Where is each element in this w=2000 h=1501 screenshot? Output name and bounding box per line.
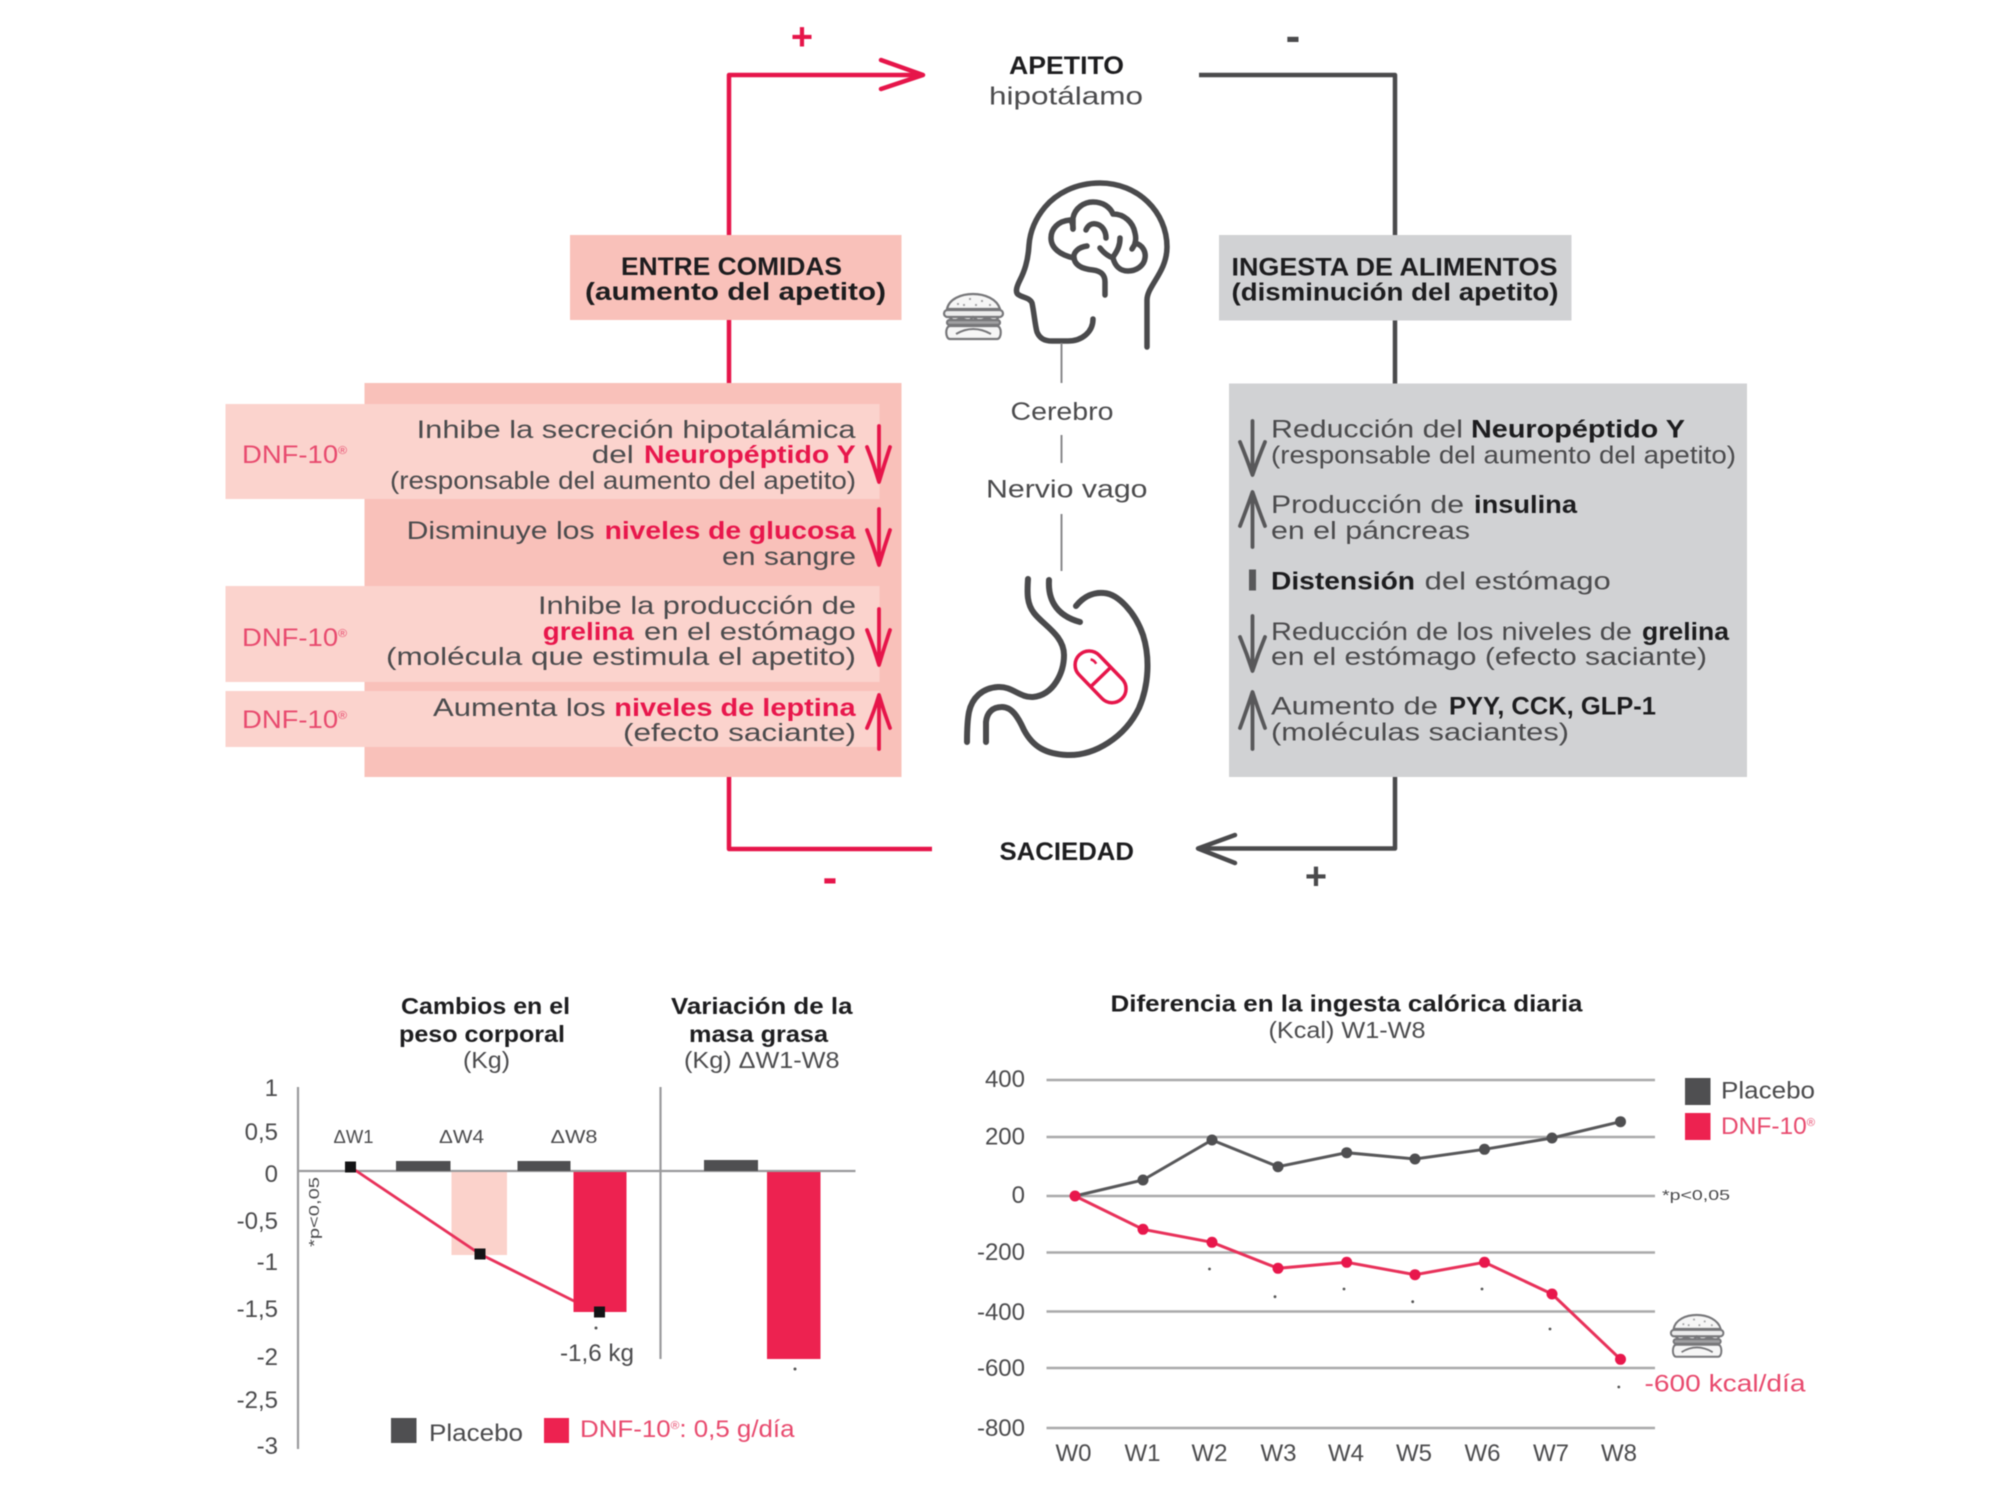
chart: body weight and fat mass bars — [237, 993, 856, 1460]
text: insulina — [1271, 491, 1578, 545]
legend: Placebo — [1721, 1078, 1815, 1104]
note: significance: *p<0,05 — [1662, 1187, 1730, 1204]
y axis labels: -2 — [257, 1344, 278, 1371]
label: nervio vago: Nervio vago — [986, 476, 1148, 504]
box: ingesta de alimentos — [1219, 235, 1572, 320]
legend: DNF-10 — [1721, 1113, 1805, 1140]
text: leptina — [433, 694, 857, 747]
heading: saciedad: SACIEDAD — [1000, 838, 1134, 866]
icon: stomach with pill — [967, 579, 1148, 755]
heading: apetito: hipotálamo — [989, 82, 1143, 110]
x axis labels: W2 — [1192, 1440, 1228, 1467]
label: DNF-10 row 1: DNF-10 — [242, 441, 330, 469]
icon: head with brain — [1016, 183, 1167, 347]
text: grelina — [1271, 618, 1730, 671]
text: grelina: (molécula que estimula el apetito) — [386, 643, 856, 671]
label: DNF-10 row 4: ® — [338, 710, 347, 722]
box: ingesta de alimentos: INGESTA DE ALIMENTOS — [1232, 254, 1558, 282]
legend: : 0,5 g/día — [679, 1416, 795, 1443]
sign: plus top left: + — [791, 16, 813, 58]
label: DNF-10 row 4: DNF-10 — [242, 706, 330, 734]
text: neuropeptido Y: (responsable del aumento del apetito) — [1271, 442, 1736, 470]
week labels: ΔW1 — [334, 1127, 374, 1147]
text: neuropeptido Y: Reducción del — [1271, 416, 1463, 444]
chart title: masa grasa: Variación de la — [671, 993, 853, 1019]
legend: DNF-10 — [580, 1416, 664, 1443]
text: glucosa: en sangre — [722, 543, 856, 571]
y axis labels: -200 — [977, 1239, 1025, 1266]
y axis labels — [237, 1075, 278, 1460]
icon: burger near head — [944, 294, 1003, 339]
box: entre comidas — [570, 235, 902, 320]
note: significance: *p<0,05 — [306, 1177, 323, 1247]
significance marks — [1208, 1268, 1620, 1388]
grid lines — [1046, 1080, 1655, 1428]
DNF-10 bars and trend line — [350, 1167, 820, 1359]
callout: -1,6 kg: -1,6 kg — [560, 1340, 634, 1367]
brain outline — [1051, 202, 1145, 295]
legend — [391, 1416, 795, 1447]
y axis labels — [977, 1066, 1025, 1442]
y axis labels: -800 — [977, 1415, 1025, 1442]
text: PYY CCK GLP-1: PYY, CCK, GLP-1 — [1449, 692, 1656, 720]
icon: burger near chart — [1671, 1315, 1723, 1357]
legend — [1685, 1078, 1815, 1140]
text: grelina: Inhibe la producción de — [538, 592, 856, 620]
text: neuropeptido Y: Inhibe la secreción hipotalámica — [417, 416, 856, 444]
text: grelina: Reducción de los niveles de — [1271, 618, 1632, 646]
flow: red appetite loop arrow — [729, 60, 932, 849]
text: PYY CCK GLP-1: Aumento de — [1271, 692, 1438, 720]
chart title: masa grasa: masa grasa — [689, 1021, 828, 1047]
sign: minus top right: - — [1286, 12, 1300, 60]
y axis labels: -1 — [257, 1249, 278, 1276]
text: neuropeptido Y: Neuropéptido Y — [1471, 416, 1685, 444]
connector: brain to stomach — [1060, 343, 1062, 571]
legend: ® — [1807, 1117, 1815, 1129]
y axis labels: -2,5 — [237, 1387, 278, 1414]
chart axes — [298, 1087, 856, 1449]
heading: apetito — [989, 52, 1143, 110]
y axis labels: -3 — [257, 1433, 278, 1460]
text: neuropeptido Y — [1271, 416, 1736, 470]
chart title: cambios peso — [399, 993, 570, 1073]
heading: apetito: APETITO — [1009, 52, 1124, 80]
text: neuropeptido Y: Neuropéptido Y — [644, 441, 856, 469]
text: leptina: niveles de leptina — [614, 694, 857, 722]
text: distension: Distensión — [1271, 568, 1415, 596]
callout: -600 kcal/dia: -600 kcal/día — [1644, 1370, 1806, 1398]
panel: DNF-10 effects between meals — [226, 383, 902, 777]
placebo bars — [396, 1160, 758, 1171]
text: glucosa — [407, 517, 857, 571]
text: insulina: en el páncreas — [1271, 517, 1470, 545]
panel: effects of food intake — [1229, 384, 1747, 777]
label: DNF-10 row 3: ® — [338, 628, 347, 640]
y axis labels: 0 — [1012, 1182, 1025, 1209]
week labels: ΔW8 — [550, 1127, 598, 1147]
text: neuropeptido Y: (responsable del aumento del apetito) — [390, 467, 856, 495]
arrows: red direction arrows — [867, 426, 890, 749]
text: grelina: grelina — [543, 618, 635, 646]
x axis labels: W0 — [1056, 1440, 1092, 1467]
label: DNF-10 row 1: ® — [338, 445, 347, 457]
text: insulina: Producción de — [1271, 491, 1464, 519]
y axis labels: -1,5 — [237, 1296, 278, 1323]
chart title: cambios peso: peso corporal — [399, 1021, 565, 1047]
arrows: grey direction arrows — [1240, 421, 1265, 749]
y axis labels: 400 — [985, 1066, 1025, 1093]
text: grelina — [386, 592, 856, 671]
box: entre comidas: ENTRE COMIDAS — [621, 253, 842, 281]
y axis labels: 1 — [265, 1075, 278, 1102]
chart title: masa grasa — [671, 993, 853, 1073]
box: entre comidas: (aumento del apetito) — [585, 278, 886, 306]
text: neuropeptido Y: del — [592, 441, 634, 469]
label: cerebro: Cerebro — [1010, 398, 1114, 426]
y axis labels: 0 — [265, 1161, 278, 1188]
x axis labels: W8 — [1601, 1440, 1637, 1467]
x axis labels: W1 — [1124, 1440, 1160, 1467]
label: DNF-10 row 3: DNF-10 — [242, 624, 330, 652]
text: glucosa: Disminuye los — [407, 517, 595, 545]
chart title: masa grasa: (Kg) ΔW1-W8 — [684, 1047, 840, 1073]
y axis labels: -600 — [977, 1355, 1025, 1382]
x axis labels: W5 — [1396, 1440, 1432, 1467]
trend markers — [345, 1162, 796, 1370]
text: distension — [1271, 568, 1611, 596]
x axis labels: W3 — [1260, 1440, 1296, 1467]
sign: minus bottom left: - — [823, 853, 837, 902]
y axis labels: 200 — [985, 1124, 1025, 1150]
text: neuropeptido Y — [390, 416, 856, 495]
text: grelina: grelina — [1642, 618, 1730, 646]
y axis labels: -400 — [977, 1299, 1025, 1326]
y axis labels: -0,5 — [237, 1208, 278, 1235]
text: leptina: Aumenta los — [433, 694, 606, 722]
chart title — [1110, 990, 1583, 1043]
text: grelina: en el estómago (efecto saciante) — [1271, 643, 1707, 671]
chart title: Diferencia en la ingesta calórica diaria — [1110, 990, 1583, 1016]
y axis labels: 0,5 — [245, 1119, 278, 1146]
legend: Placebo — [429, 1420, 523, 1447]
chart title: cambios peso: (Kg) — [463, 1047, 510, 1073]
text: leptina: (efecto saciante) — [623, 719, 856, 747]
chart: daily calorie intake difference — [977, 990, 1815, 1467]
sign: plus bottom right: + — [1305, 856, 1327, 898]
week labels: ΔW4 — [439, 1127, 484, 1147]
x axis labels: W4 — [1328, 1440, 1364, 1467]
icon: pill — [1069, 645, 1132, 709]
x axis labels: W6 — [1464, 1440, 1500, 1467]
text: distension: del estómago — [1425, 568, 1611, 596]
icon: neutral bar — [1249, 570, 1256, 590]
chart title: cambios peso: Cambios en el — [401, 993, 570, 1019]
legend: ® — [671, 1420, 679, 1432]
placebo line — [1075, 1116, 1626, 1196]
text: PYY CCK GLP-1 — [1271, 692, 1656, 746]
text: insulina: insulina — [1474, 491, 1578, 519]
x axis labels: W7 — [1533, 1440, 1569, 1467]
DNF-10 line — [1070, 1190, 1626, 1365]
text: PYY CCK GLP-1: (moléculas saciantes) — [1271, 718, 1569, 746]
x axis labels — [1056, 1440, 1637, 1467]
week labels — [334, 1127, 598, 1147]
chart title: (Kcal) W1-W8 — [1268, 1017, 1426, 1043]
box: ingesta de alimentos: (disminución del apetito) — [1232, 278, 1558, 306]
flow: grey satiety loop arrow — [1198, 75, 1395, 863]
text: grelina: en el estómago — [644, 618, 856, 646]
text: glucosa: niveles de glucosa — [605, 517, 857, 545]
